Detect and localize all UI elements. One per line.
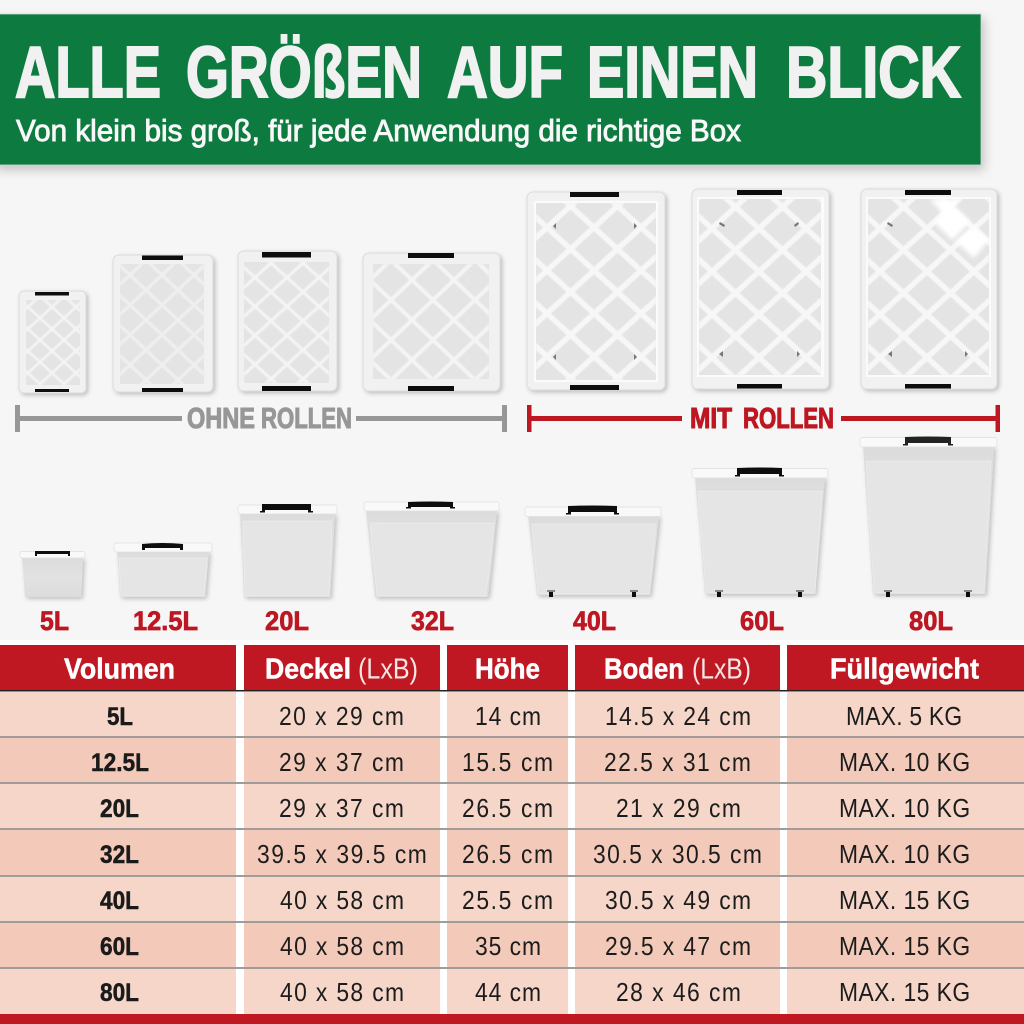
row 20L [100,795,970,823]
top view boxes [19,189,997,393]
box 32L front [364,502,499,597]
row 60L [100,933,970,961]
row 80L: 44 cm [475,979,541,1007]
title: ALLE [15,33,161,113]
volume labels: 20L [265,606,309,636]
row 60L: 40 x 58 cm [280,933,404,961]
front view boxes [20,436,997,597]
row 20L: 29 x 37 cm [279,795,404,823]
row 32L: MAX. 10 KG [839,841,970,869]
row 5L [107,703,962,731]
box 5L front [20,551,85,597]
table header: (LxB) [692,654,751,686]
volume labels: 60L [740,606,784,636]
box 40L front [525,506,661,597]
row 80L: 80L [100,979,139,1007]
table bottom bar [0,1014,1024,1024]
row 20L: MAX. 10 KG [839,795,970,823]
row 5L: 14 cm [475,703,541,731]
title: EINEN [587,33,758,113]
row 12.5L: 15.5 cm [462,749,553,777]
subtitle: Von klein bis groß, für jede Anwendung die richtige Box [16,113,741,148]
row 32L: 39.5 x 39.5 cm [257,841,427,869]
volume labels: 5L [40,606,69,636]
row 20L: 21 x 29 cm [616,795,741,823]
row 20L: 26.5 cm [462,795,553,823]
row 5L: 5L [107,703,133,731]
table header: Füllgewicht [830,654,979,686]
row 40L: MAX. 15 KG [839,887,970,915]
bracket: ohne Rollen: OHNE [187,403,255,435]
row 60L: MAX. 15 KG [839,933,970,961]
row 32L: 30.5 x 30.5 cm [593,841,762,869]
row 60L: 60L [100,933,139,961]
row 80L: MAX. 15 KG [839,979,970,1007]
row 60L: 29.5 x 47 cm [605,933,751,961]
row 12.5L [91,749,970,777]
row 60L: 35 cm [475,933,541,961]
volume labels: 80L [909,606,953,636]
row 12.5L: 29 x 37 cm [279,749,404,777]
table header: Volumen [64,654,175,686]
row 40L: 40L [100,887,139,915]
row 12.5L: 12.5L [91,749,149,777]
volume labels [40,606,953,636]
row 40L [100,887,970,915]
table header [0,645,1024,692]
bracket: ohne Rollen [15,403,507,435]
row 80L: 40 x 58 cm [280,979,404,1007]
row 12.5L: MAX. 10 KG [839,749,970,777]
lid 60L top view [692,189,829,389]
row 32L [100,841,970,869]
lid 20L top view [238,251,337,391]
lid 80L top view [861,189,997,389]
row 40L: 25.5 cm [462,887,553,915]
row 20L: 20L [100,795,139,823]
title banner [0,14,981,165]
lid 5L top view [19,291,86,393]
lid 40L top view [527,192,665,390]
row backgrounds [0,692,1024,1014]
bracket: mit Rollen: MIT [690,403,732,435]
row 80L: 28 x 46 cm [616,979,741,1007]
row 32L: 32L [100,841,139,869]
bracket: mit Rollen: ROLLEN [743,403,834,435]
box 60L front [692,468,828,597]
box 80L front [860,436,997,597]
row 40L: 40 x 58 cm [280,887,404,915]
row 5L: 14.5 x 24 cm [605,703,751,731]
table header: Boden [604,654,684,686]
row 80L [100,979,970,1007]
row 40L: 30.5 x 49 cm [605,887,751,915]
lid 12.5L top view [113,255,213,392]
bracket: ohne Rollen: ROLLEN [261,403,352,435]
row 5L: MAX. 5 KG [846,703,962,731]
box 12.5L front [114,543,212,597]
table header: Deckel [265,654,351,686]
title: GRÖßEN [186,33,422,113]
table header: (LxB) [358,654,418,686]
volume labels: 12.5L [133,606,198,636]
title: AUF [447,33,563,113]
row 12.5L: 22.5 x 31 cm [604,749,751,777]
box 20L front [238,504,337,597]
lid 32L top view [363,253,500,391]
bracket: mit Rollen [527,403,1000,435]
volume labels: 32L [411,606,454,636]
size table [0,640,1024,1024]
row 32L: 26.5 cm [462,841,553,869]
title [15,33,961,113]
row 5L: 20 x 29 cm [279,703,404,731]
volume labels: 40L [573,606,616,636]
table header: Höhe [475,654,540,686]
title: BLICK [786,33,961,113]
